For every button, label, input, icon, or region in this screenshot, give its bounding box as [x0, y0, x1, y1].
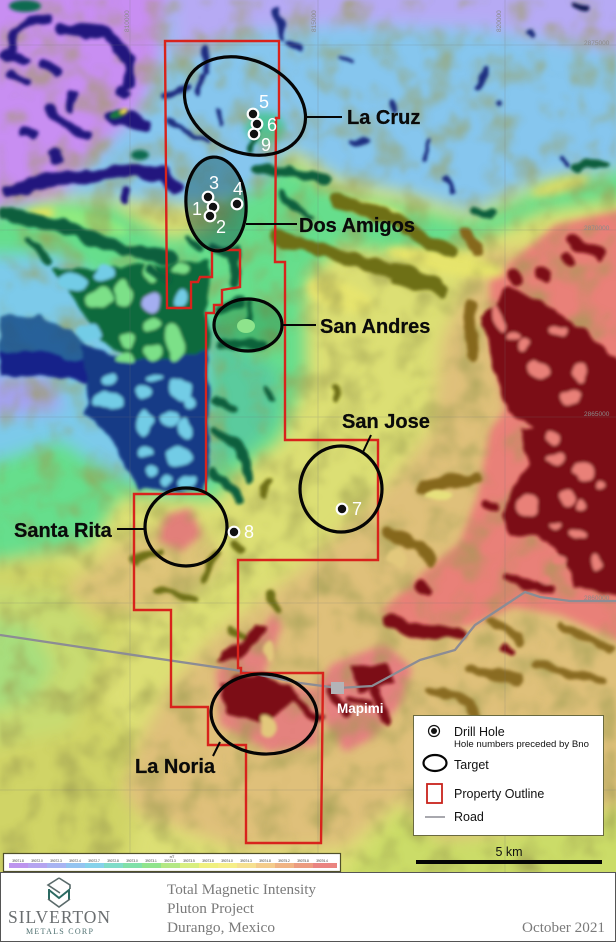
- colour scale bar: 39073.0: [126, 859, 138, 863]
- spark and top-left teal: [9, 0, 149, 160]
- target: Santa Rita: Santa Rita: [14, 520, 113, 542]
- target: Dos Amigos: [183, 155, 415, 253]
- graticule grid lines and coordinates: 820000: [496, 10, 503, 32]
- target: San Andres: [214, 299, 430, 351]
- target: Dos Amigos: Dos Amigos: [299, 215, 415, 237]
- map title text: Pluton Project: [167, 901, 255, 917]
- dark band and lattice: [0, 262, 208, 490]
- drill holes with numbers: 1: [192, 199, 202, 219]
- maroon relief: [218, 240, 616, 738]
- legend: Hole numbers preceded by Bno: [454, 739, 589, 750]
- target: La Cruz: [169, 38, 420, 174]
- logo: Silverton Metals Corp: [8, 878, 110, 936]
- drill holes with numbers: 2: [216, 217, 226, 237]
- colour scale bar: 39074.8: [259, 859, 271, 863]
- colour scale bar: 39075.8: [297, 859, 309, 863]
- graticule grid lines and coordinates: 810000: [124, 10, 131, 32]
- map title text: [167, 882, 317, 936]
- colour scale bar: 39072.3: [50, 859, 62, 863]
- map title text: Total Magnetic Intensity: [167, 882, 317, 898]
- colour scale bar: 39073.8: [202, 859, 214, 863]
- target: San Andres: San Andres: [320, 316, 430, 338]
- olive and brown relief: [135, 202, 610, 730]
- target: La Cruz: La Cruz: [347, 107, 420, 129]
- colour scale bar: 39071.8: [12, 859, 24, 863]
- colour scale bar: 39074.0: [221, 859, 233, 863]
- property outline: [134, 41, 378, 843]
- drill holes with numbers: 8: [244, 522, 254, 542]
- drill holes with numbers: 6: [267, 115, 277, 135]
- date: October 2021: [522, 920, 605, 936]
- road: [0, 592, 616, 688]
- colour scale bar: 39072.7: [88, 859, 100, 863]
- target: Santa Rita: [14, 488, 227, 566]
- target: La Noria: [135, 670, 320, 778]
- colour scale bar: 39075.2: [278, 859, 290, 863]
- colour scale bar: 39073.1: [145, 859, 157, 863]
- scale bar: 5 km: [495, 845, 523, 859]
- graticule grid lines and coordinates: 815000: [311, 10, 318, 32]
- colour scale bar: 39076.4: [316, 859, 328, 863]
- colour scale bar: 39072.8: [107, 859, 119, 863]
- target: San Jose: [300, 411, 430, 532]
- footer panel: [0, 872, 616, 942]
- legend: Target: [454, 758, 489, 772]
- drill holes with numbers: 7: [352, 499, 362, 519]
- graticule grid lines and coordinates: 2875000: [584, 40, 610, 47]
- colour scale bar: 39074.3: [240, 859, 252, 863]
- dark navy relief: [5, 6, 586, 200]
- logo: Silverton Metals Corp: METALS CORP: [26, 927, 94, 936]
- legend: Property Outline: [454, 787, 544, 801]
- colour scale bar: 39073.5: [183, 859, 195, 863]
- graticule grid lines and coordinates: 2870000: [584, 225, 610, 232]
- colour scale bar: [4, 854, 340, 872]
- map title text: Durango, Mexico: [167, 920, 275, 936]
- dark green relief: [5, 130, 604, 500]
- graticule grid lines and coordinates: 2860000: [584, 595, 610, 602]
- colour scale bar: 39072.4: [69, 859, 81, 863]
- drill holes with numbers: 5: [259, 92, 269, 112]
- logo: Silverton Metals Corp: SILVERTON: [8, 907, 110, 927]
- target: San Jose: San Jose: [342, 411, 430, 433]
- drill holes with numbers: [192, 92, 362, 542]
- legend: [414, 716, 604, 836]
- town: Mapimi: [331, 682, 384, 716]
- legend: Drill Hole: [454, 725, 505, 739]
- town: Mapimi: Mapimi: [337, 701, 384, 716]
- drill holes with numbers: 3: [209, 173, 219, 193]
- legend: Road: [454, 810, 484, 824]
- colour scale bar: nT: [170, 854, 175, 859]
- drill holes with numbers: 9: [261, 135, 271, 155]
- target: La Noria: La Noria: [135, 756, 216, 778]
- colour scale bar: 39072.0: [31, 859, 43, 863]
- graticule grid lines and coordinates: 2865000: [584, 411, 610, 418]
- scale bar: [416, 845, 602, 864]
- drill holes with numbers: 4: [233, 179, 243, 199]
- colour scale bar: 39073.3: [164, 859, 176, 863]
